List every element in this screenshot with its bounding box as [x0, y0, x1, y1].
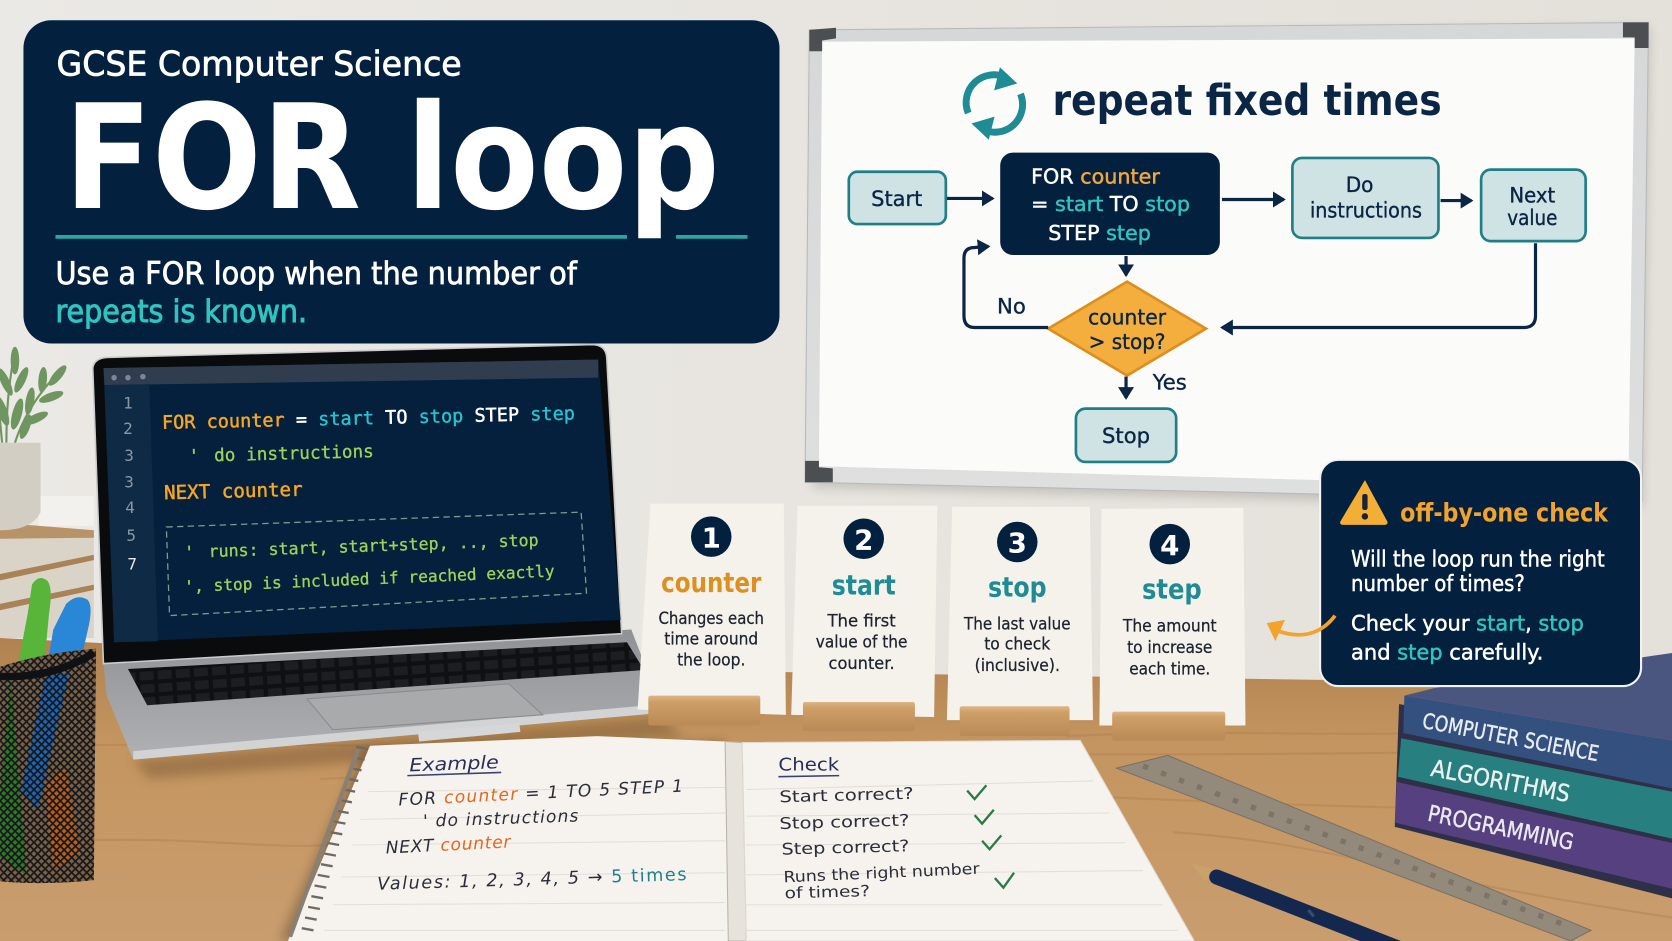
arrow: next back to decision — [1222, 243, 1536, 328]
laptop — [93, 345, 682, 779]
card 3: stop: to check — [984, 635, 1050, 655]
title panel — [23, 20, 779, 344]
card 1: counter — [638, 504, 786, 725]
stacked books — [1395, 653, 1672, 898]
card 4: step: step — [1142, 573, 1202, 606]
callout heading: off-by-one check — [1400, 499, 1609, 529]
card 3: stop: 3 — [1008, 527, 1027, 560]
card 4: step: to increase — [1127, 638, 1212, 658]
concept cards — [638, 504, 1245, 740]
code editor screen — [103, 360, 621, 642]
flow node: Next value: Next — [1509, 184, 1555, 209]
card 2: start: counter. — [829, 654, 895, 674]
book: programming: PROGRAMMING — [1426, 801, 1576, 856]
line numbers: 4 — [125, 498, 135, 517]
callout advice: and step carefully. — [1351, 639, 1543, 664]
flow node: FOR statement: FOR counter — [1031, 165, 1160, 189]
laptop base shadow — [133, 717, 682, 779]
card 1: counter: Changes each — [658, 609, 764, 629]
book: computer science: COMPUTER SCIENCE — [1420, 709, 1601, 767]
arrow: start to for — [947, 197, 993, 200]
card 2: start — [791, 506, 937, 731]
flow node: Stop: Stop — [1102, 424, 1150, 449]
callout question — [1351, 547, 1605, 597]
flow node: FOR statement: = start TO stop — [1031, 192, 1190, 216]
code: NEXT line: NEXT counter — [164, 478, 303, 504]
callout question: Will the loop run the right — [1351, 547, 1605, 573]
arrow: Yes branch — [1125, 377, 1128, 398]
card 3: stop: stop — [988, 570, 1047, 603]
whiteboard heading: repeat fixed times — [1052, 76, 1442, 126]
card 1: counter: the loop. — [677, 651, 745, 671]
notebook left page — [288, 736, 728, 941]
card 3: stop — [947, 507, 1093, 736]
card 1: counter: time around — [664, 629, 758, 649]
notebook code: FOR line: FOR counter = 1 TO 5 STEP 1 — [398, 777, 685, 810]
pen — [1191, 863, 1397, 941]
flow node: Start: Start — [871, 187, 922, 212]
arrow: for to decision — [1125, 256, 1128, 275]
title description — [55, 256, 578, 330]
flow node: Do instructions: Do — [1346, 173, 1373, 198]
flow node: Next value: value — [1507, 206, 1557, 231]
heading: Example: Example — [409, 752, 499, 776]
check item: runs — [783, 860, 1014, 902]
check item: step — [781, 835, 1001, 859]
code: comment line: ' do instructions — [188, 442, 374, 467]
line numbers: 5 — [126, 526, 136, 545]
flow node: decision diamond — [1048, 282, 1206, 376]
card 2: start: 2 — [854, 523, 873, 556]
laptop base — [103, 629, 663, 760]
arrow: callout to step card — [1267, 616, 1335, 641]
card 3: stop: (inclusive). — [975, 656, 1060, 676]
icon: repeat cycle arrows — [966, 68, 1023, 139]
icon: warning triangle — [1341, 482, 1386, 524]
book: programming — [1395, 782, 1672, 889]
code note box: ' runs: start, start+step, .., stop — [184, 531, 539, 562]
wall background — [0, 0, 1672, 704]
notebook — [279, 736, 1194, 941]
main title: FOR loop — [64, 74, 720, 243]
card 4: step: each time. — [1129, 659, 1210, 679]
book: algorithms — [1398, 738, 1672, 839]
notebook values line: Values: 1, 2, 3, 4, 5 → 5 times — [377, 865, 688, 895]
label: No: No — [997, 295, 1026, 320]
card 1: counter: counter — [661, 566, 762, 599]
check item: runs: of times? — [784, 882, 870, 902]
code: FOR line: FOR counter = start TO stop STEP step — [162, 404, 575, 434]
card 2: start: start — [832, 568, 896, 601]
subject line: GCSE Computer Science — [57, 45, 462, 85]
card 4: step: 4 — [1160, 529, 1179, 562]
line numbers: 2 — [123, 419, 133, 438]
pen holder with pens — [0, 578, 96, 883]
heading: Check: Check — [778, 754, 840, 775]
card 4: step: The amount — [1122, 617, 1217, 637]
line numbers: 1 — [123, 394, 133, 413]
check item: stop — [779, 810, 994, 833]
line numbers: 3 — [124, 473, 134, 492]
notebook code: comment: ' do instructions — [423, 806, 580, 832]
flow node: FOR statement — [1000, 153, 1220, 255]
title description: repeats is known. — [55, 294, 307, 330]
notebook spine — [725, 741, 746, 941]
card 2: start: value of the — [816, 633, 907, 653]
flow node: decision diamond: counter — [1088, 305, 1166, 330]
notebook code: NEXT: NEXT counter — [385, 832, 512, 859]
label: Yes: Yes — [1152, 370, 1187, 395]
whiteboard panel — [805, 22, 1650, 508]
flow node: decision diamond: > stop? — [1089, 330, 1165, 355]
flow node: Do instructions — [1292, 158, 1438, 238]
laptop lid — [93, 345, 622, 664]
check item: stop: Stop correct? — [779, 811, 910, 833]
title description: Use a FOR loop when the number of — [55, 256, 578, 292]
notebook right page — [742, 740, 1194, 941]
card 2: start: The first — [827, 611, 896, 631]
check item: start — [779, 784, 986, 806]
plant and shelf with books (left) — [0, 347, 94, 638]
callout: off-by-one check — [1320, 460, 1641, 686]
callout advice — [1351, 611, 1584, 664]
line numbers: 3 — [124, 446, 134, 465]
ruler — [1116, 755, 1591, 941]
code note box — [166, 512, 586, 616]
flow node: FOR statement: STEP step — [1048, 221, 1151, 245]
callout question: number of times? — [1351, 571, 1525, 597]
flow node: Next value — [1481, 170, 1586, 241]
card 4: step — [1099, 508, 1245, 740]
desk surface — [0, 638, 1672, 941]
book: algorithms: ALGORITHMS — [1429, 754, 1572, 808]
flow node: Stop — [1076, 409, 1176, 462]
notebook spiral binding — [290, 747, 368, 937]
title underline — [55, 235, 747, 239]
flow node: Do instructions: instructions — [1310, 199, 1422, 224]
arrow: do to next — [1441, 199, 1472, 202]
flow node: Start — [849, 172, 946, 224]
check item: start: Start correct? — [779, 784, 914, 806]
check item: runs: Runs the right number — [783, 860, 981, 886]
arrow: No branch — [964, 246, 1048, 328]
flowchart — [849, 153, 1586, 462]
check item: step: Step correct? — [781, 836, 910, 859]
book: computer science — [1403, 696, 1672, 788]
line numbers: 7 — [127, 555, 137, 574]
card 1: counter: 1 — [702, 521, 721, 554]
code note box: ', stop is included if reached exactly — [184, 562, 555, 596]
line numbers — [123, 394, 137, 574]
arrow: for to do — [1222, 198, 1284, 201]
callout advice: Check your start, stop — [1351, 611, 1584, 636]
card 3: stop: The last value — [963, 614, 1071, 634]
